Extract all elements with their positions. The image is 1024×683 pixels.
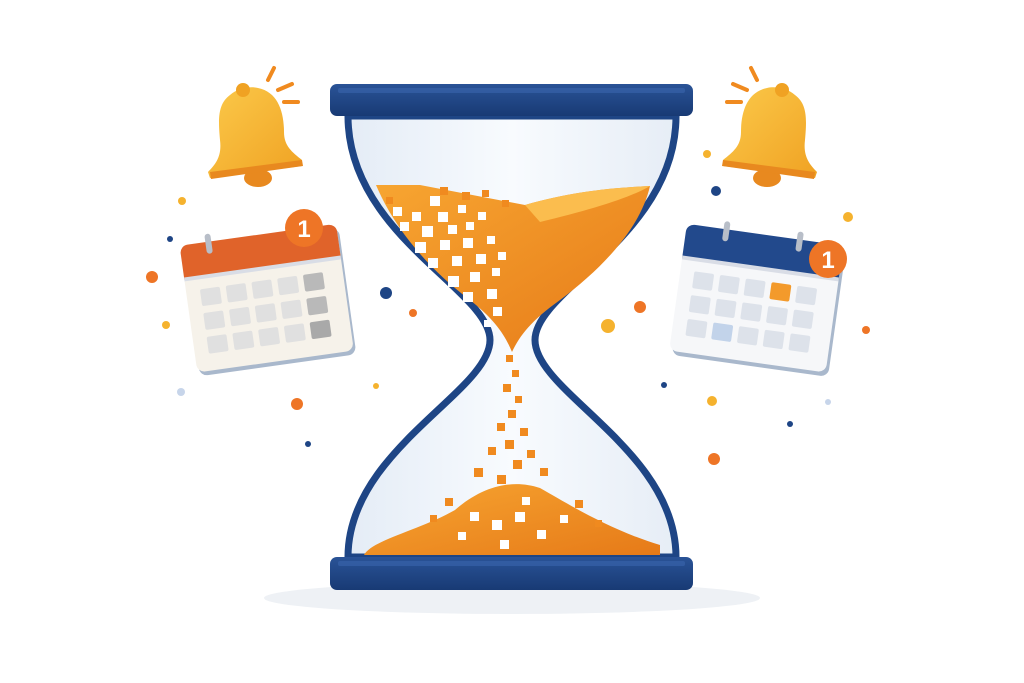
top cap [330, 84, 693, 116]
falling sand [474, 355, 548, 484]
bottom sand [364, 484, 660, 555]
icon: right bell [722, 68, 817, 187]
badge: left calendar: 1 [297, 216, 311, 243]
calendar: left [178, 216, 356, 376]
shadow [264, 582, 760, 614]
top sand [376, 185, 650, 352]
calendar: right [669, 216, 847, 377]
badge: right calendar [809, 240, 847, 278]
bottom cap [330, 557, 693, 590]
hourglass [330, 84, 693, 590]
decorative dots [146, 150, 870, 465]
glass body [348, 116, 676, 557]
icon: left bell [208, 68, 303, 187]
badge: left calendar [285, 209, 323, 247]
badge: right calendar: 1 [821, 247, 835, 274]
